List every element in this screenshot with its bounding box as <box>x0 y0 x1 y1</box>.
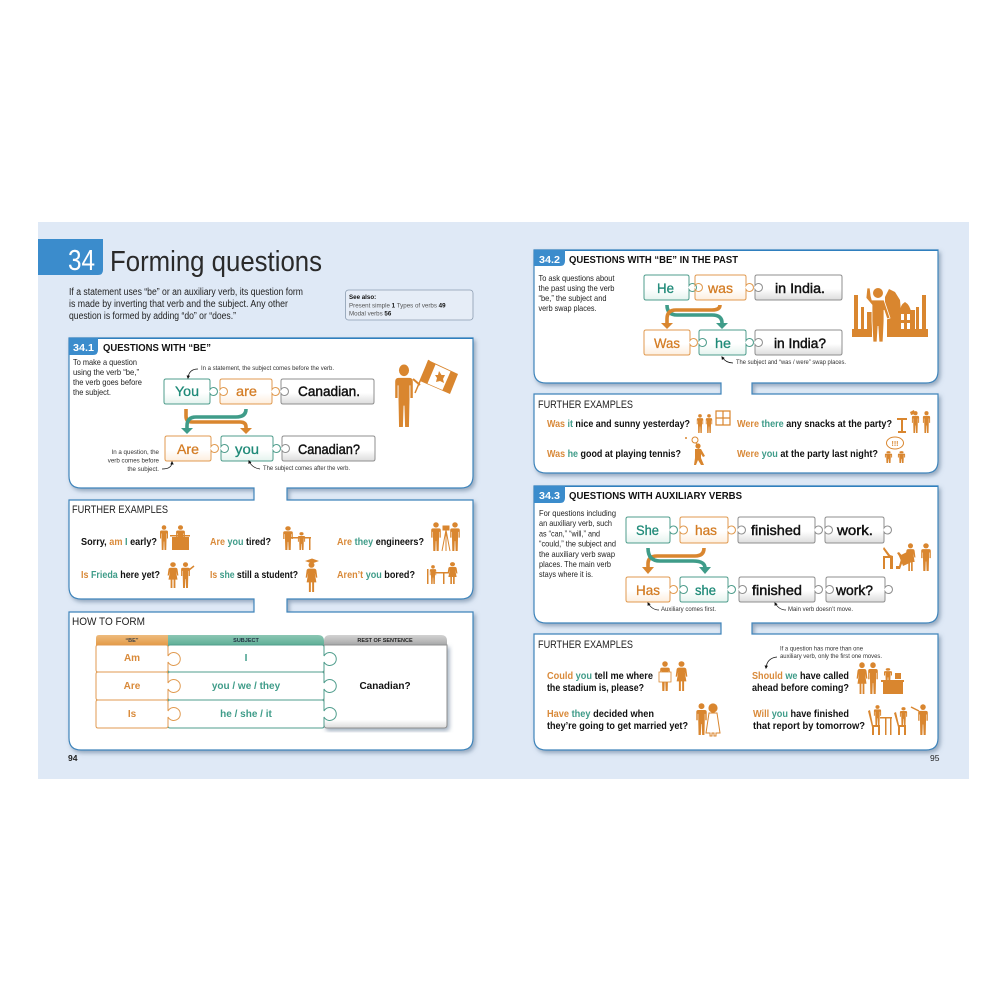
further examples 34.3 sentences: Should we have called <box>752 670 849 682</box>
icon: engineers with tripod <box>431 522 460 551</box>
34.1 statement puzzle row <box>164 379 374 404</box>
section 34.2 heading <box>534 250 938 266</box>
page number 95: 95 <box>930 753 940 763</box>
section 34.2 heading: QUESTIONS WITH “BE” IN THE PAST <box>569 254 739 266</box>
34.1 explanation: To make a question <box>73 357 137 367</box>
further examples 34.3 sentences: ahead before coming? <box>752 682 849 694</box>
34.3 annotations: Main verb doesn’t move. <box>788 606 853 613</box>
icon: two people greeting <box>168 562 194 588</box>
34.3 statement puzzle row: work. <box>836 522 873 538</box>
rest of sentence column: Canadian? <box>359 681 411 692</box>
34.3 further examples note: If a question has more than one <box>780 646 864 652</box>
34.3 question puzzle row: work? <box>835 582 873 598</box>
section 34.3 heading: 34.3 <box>539 490 560 502</box>
34.3 explanation: places. The main verb <box>539 559 611 569</box>
row labels: I <box>245 653 248 664</box>
34.1 question puzzle row <box>165 436 375 461</box>
34.3 explanation: “could,” the subject and <box>539 538 616 548</box>
row labels: Am <box>124 653 140 664</box>
34.1 explanation: using the verb “be,” <box>73 367 139 377</box>
icon: tired man and child at a table <box>283 526 311 550</box>
row labels: you / we / they <box>212 681 281 692</box>
icon: tennis player <box>685 437 705 465</box>
34.2 question puzzle row <box>644 330 842 355</box>
34.2 statement puzzle row <box>644 275 842 300</box>
34.1 explanation: the subject. <box>73 387 111 397</box>
see also box: See also: <box>349 294 376 301</box>
row labels: Are <box>124 681 141 692</box>
icon: bride and groom <box>696 703 720 736</box>
34.1 explanation: the verb goes before <box>73 377 142 387</box>
34.1 question puzzle row: you <box>235 441 259 457</box>
34.3 explanation: an auxiliary verb, such <box>539 518 612 528</box>
further examples 34.3 sentences: Could you tell me where <box>547 670 653 682</box>
further examples 34.3 sentences <box>547 670 865 732</box>
chapter number tab <box>38 239 103 277</box>
34.2 question puzzle row: Was <box>654 335 680 351</box>
34.3 question puzzle row: finished <box>752 582 802 598</box>
page number 94: 94 <box>68 753 78 763</box>
section 34.1 heading: QUESTIONS WITH “BE” <box>103 342 211 354</box>
34.1 swap arrows <box>181 409 252 434</box>
34.2 statement puzzle row: was <box>707 280 733 296</box>
34.3 statement puzzle row: She <box>636 522 659 538</box>
further examples 34.2 sentences: Was he good at playing tennis? <box>547 448 681 460</box>
see also box <box>346 290 473 320</box>
panel: bottom right <box>534 486 938 750</box>
34.2 swap arrows <box>661 305 728 329</box>
34.3 further examples note <box>766 646 882 668</box>
further examples 34.3 sentences: the stadium is, please? <box>547 682 644 694</box>
34.1 question puzzle row: Are <box>177 441 199 457</box>
further examples 34.3 sentences: that report by tomorrow? <box>753 720 865 732</box>
further examples 34.2 sentences: Was it nice and sunny yesterday? <box>547 418 690 430</box>
icon: couple at reception desk <box>857 662 904 694</box>
icon: office meeting <box>868 704 928 735</box>
further examples 34.1 sentences: Is Frieda here yet? <box>81 569 160 581</box>
intro text: question is formed by adding “do” or “does.” <box>69 311 236 322</box>
34.2 question puzzle row: in India? <box>774 335 826 351</box>
column headers: REST OF SENTENCE <box>357 638 413 644</box>
further examples 34.3 sentences: Will you have finished <box>753 708 849 720</box>
intro text: is made by inverting that verb and the subject. Any other <box>69 299 289 310</box>
icon: office workers <box>883 543 931 571</box>
34.3 explanation: the auxiliary verb swap <box>539 549 615 559</box>
34.2 explanation: the past using the verb <box>538 283 615 293</box>
34.1 statement puzzle row: You <box>175 383 199 399</box>
34.3 explanation: For questions including <box>539 508 616 518</box>
heading: how to form: HOW TO FORM <box>72 616 145 628</box>
34.2 statement puzzle row: in India. <box>775 280 825 296</box>
further examples 34.1 sentences: Are you tired? <box>210 536 271 548</box>
34.2 annotation <box>722 357 846 366</box>
further examples 34.2 sentences: Were there any snacks at the party? <box>737 418 892 430</box>
34.1 annotations: In a question, the <box>112 449 160 456</box>
icon: man with Canadian flag <box>395 360 458 427</box>
icon: man with map and woman <box>659 661 687 691</box>
further examples 34.3 sentences: Have they decided when <box>547 708 654 720</box>
34.3 question puzzle row: she <box>695 582 716 598</box>
34.1 statement puzzle row: are <box>236 383 257 399</box>
34.1 annotations <box>108 365 350 473</box>
34.2 annotation: The subject and “was / were” swap places. <box>736 359 846 366</box>
34.2 explanation <box>538 273 615 313</box>
icon: two people at a window <box>697 411 730 433</box>
section 34.1 heading <box>69 338 473 355</box>
further examples 34.1 sentences: Aren’t you bored? <box>337 569 415 581</box>
34.3 question puzzle row: Has <box>636 582 660 598</box>
heading: further examples 34.3: FURTHER EXAMPLES <box>538 639 633 651</box>
34.1 question puzzle row: Canadian? <box>298 441 360 457</box>
further examples 34.2 sentences <box>547 418 892 460</box>
icon: people with snacks at a party <box>897 410 930 433</box>
section 34.1 heading: 34.1 <box>73 342 94 354</box>
34.3 explanation: stays where it is. <box>539 569 593 579</box>
how to form table <box>96 635 447 728</box>
further examples 34.1 sentences: Is she still a student? <box>210 569 298 581</box>
34.1 statement puzzle row: Canadian. <box>298 383 360 399</box>
heading: further examples 34.2: FURTHER EXAMPLES <box>538 399 633 411</box>
further examples 34.1 sentences <box>81 536 424 581</box>
section 34.3 heading <box>534 486 938 503</box>
icon: bored person at a table <box>427 562 457 584</box>
34.3 annotations: Auxiliary comes first. <box>661 606 716 613</box>
further examples 34.1 sentences: Sorry, am I early? <box>81 536 157 548</box>
title: Forming questions <box>110 246 322 278</box>
column headers: SUBJECT <box>233 638 259 644</box>
icon: two people with thought bubble: !!! <box>892 441 898 448</box>
chapter number tab: 34 <box>68 245 95 277</box>
34.1 annotations: verb comes before <box>108 458 160 464</box>
row labels: Is <box>128 709 137 720</box>
see also box: Present simple 1 Types of verbs 49 <box>349 302 446 310</box>
intro text <box>69 287 303 322</box>
34.2 statement puzzle row: He <box>657 280 674 296</box>
34.3 explanation <box>539 508 616 579</box>
further examples 34.2 sentences: Were you at the party last night? <box>737 448 878 460</box>
see also box: Modal verbs 56 <box>349 310 392 318</box>
34.3 statement puzzle row: has <box>695 522 717 538</box>
34.1 annotations: In a statement, the subject comes before the verb. <box>201 365 334 372</box>
heading: further examples 34.1: FURTHER EXAMPLES <box>72 504 168 516</box>
34.1 explanation <box>73 357 142 397</box>
34.3 question puzzle row <box>626 577 892 602</box>
icon: student with cap <box>305 558 319 592</box>
column headers <box>96 635 447 645</box>
intro text: If a statement uses “be” or an auxiliary verb, its question form <box>69 287 303 298</box>
icon: man at the Taj Mahal <box>852 288 928 342</box>
section 34.2 heading: 34.2 <box>539 254 560 266</box>
row labels <box>124 653 281 720</box>
34.3 statement puzzle row: finished <box>751 522 801 538</box>
column headers: “BE” <box>125 638 139 644</box>
icon: two people with thought bubble <box>885 437 905 463</box>
34.2 explanation: verb swap places. <box>538 303 596 313</box>
34.1 annotations: the subject. <box>127 466 159 473</box>
be rows <box>96 645 180 728</box>
34.1 annotations: The subject comes after the verb. <box>263 465 350 472</box>
icon: customer at a desk <box>160 525 190 550</box>
34.2 explanation: “be,” the subject and <box>538 293 607 303</box>
34.3 further examples note: auxiliary verb, only the first one moves. <box>780 653 882 660</box>
row labels: he / she / it <box>220 709 273 720</box>
rest of sentence column <box>324 645 447 728</box>
further examples 34.1 sentences: Are they engineers? <box>337 536 424 548</box>
34.3 annotations <box>648 603 853 613</box>
34.3 swap arrows <box>642 548 711 574</box>
34.2 explanation: To ask questions about <box>538 273 615 283</box>
further examples 34.3 sentences: they’re going to get married yet? <box>547 720 688 732</box>
panel: top right <box>534 250 938 473</box>
page background <box>38 222 969 779</box>
subject rows <box>168 645 336 728</box>
34.3 statement puzzle row <box>626 517 891 543</box>
34.2 question puzzle row: he <box>715 335 731 351</box>
panel: left column <box>69 338 473 750</box>
34.3 explanation: as “can,” “will,” and <box>539 528 600 538</box>
section 34.3 heading: QUESTIONS WITH AUXILIARY VERBS <box>569 490 742 502</box>
